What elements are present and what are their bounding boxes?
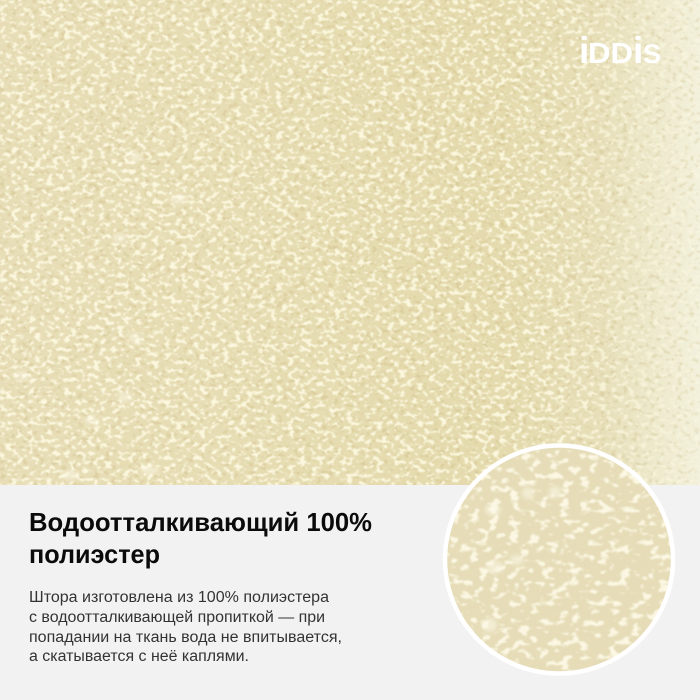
- description text: [29, 589, 342, 665]
- heading: Водоотталкивающий 100%: [29, 507, 372, 537]
- magnified circle detail of fabric: [443, 443, 675, 676]
- logo: iDDiS: i: [579, 30, 589, 71]
- description text: Штора изготовлена из 100% полиэстера: [29, 589, 329, 606]
- logo: iDDiS: i: [633, 30, 643, 71]
- bottom information panel: [0, 485, 700, 700]
- description text: попадании на ткань вода не впитывается,: [29, 629, 342, 646]
- description text: с водоотталкивающей пропиткой — при: [29, 609, 325, 626]
- logo: iDDiS: DD: [588, 38, 633, 70]
- description text: а скатывается с неё каплями.: [29, 648, 249, 665]
- heading: полиэстер: [29, 539, 160, 569]
- fabric photo with water droplets: [0, 0, 700, 485]
- logo: iDDiS: [579, 30, 661, 71]
- heading: [29, 507, 372, 569]
- logo: iDDiS: S: [643, 39, 661, 69]
